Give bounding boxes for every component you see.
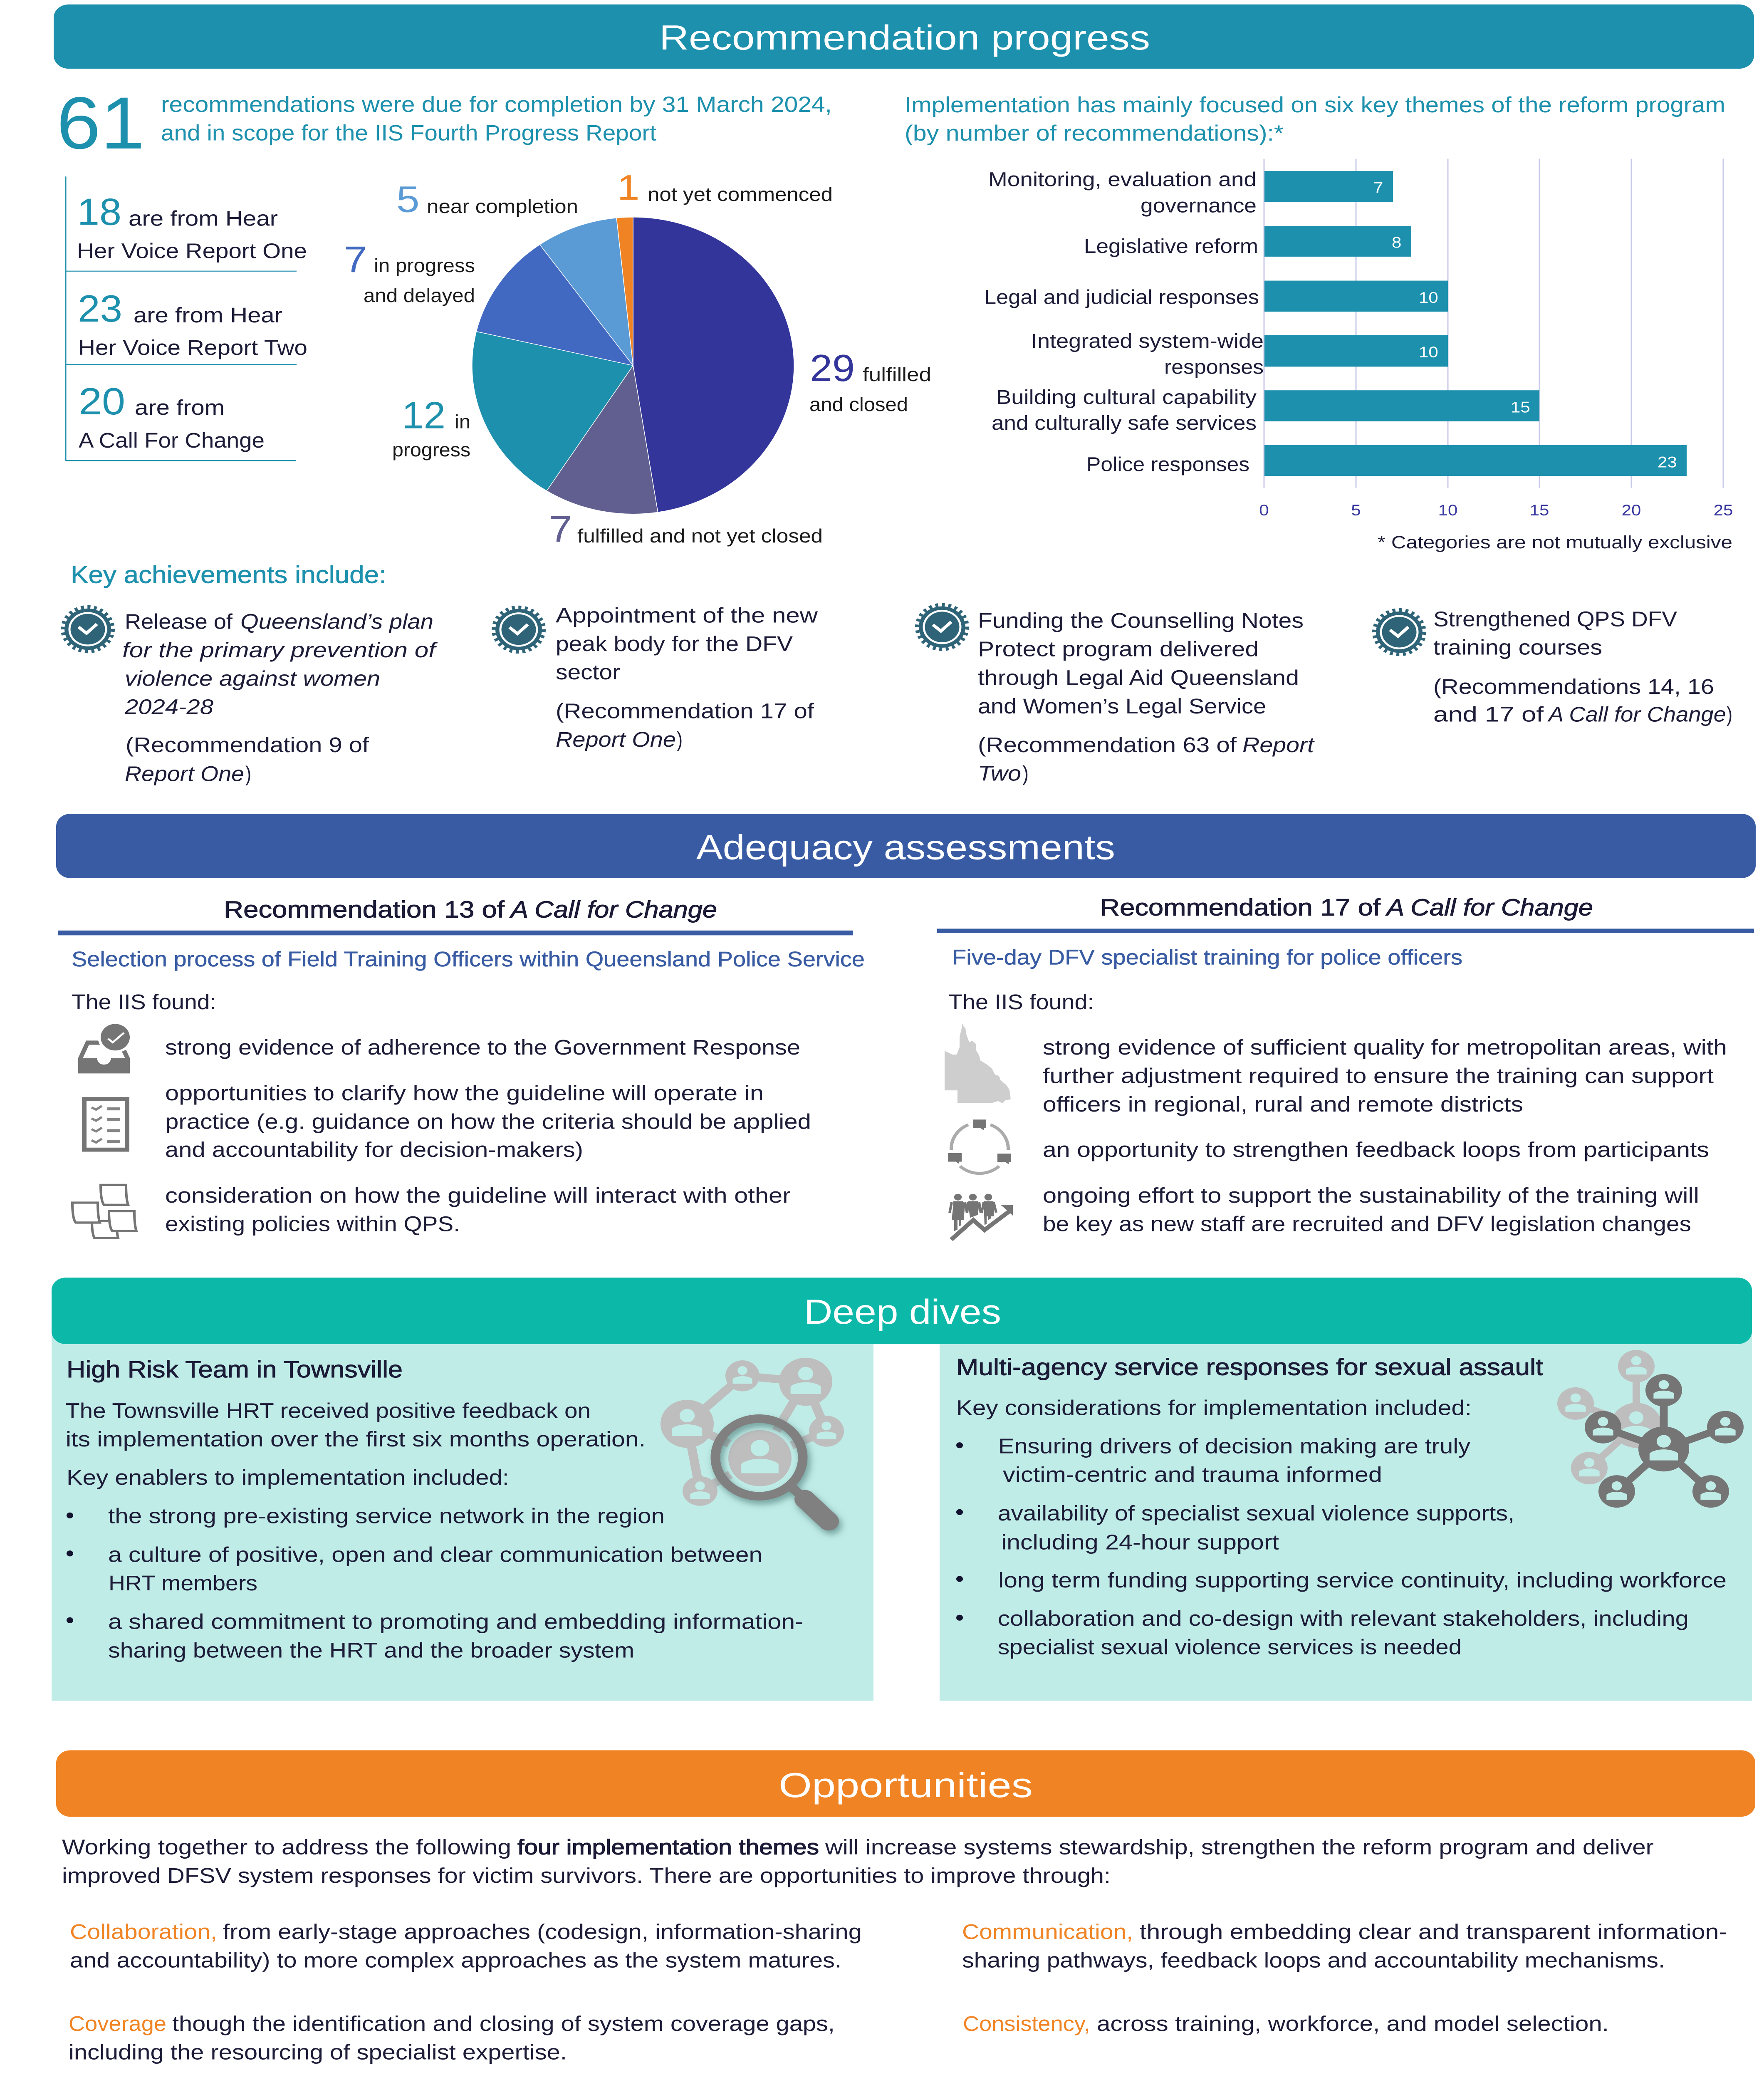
achievement 4: A Call for Change bbox=[1547, 703, 1726, 726]
panel: High Risk Team in Townsville: Key enablers to implementation included: bbox=[67, 1466, 509, 1489]
achievement 2: ) bbox=[677, 728, 683, 751]
subheading: A Call for Change bbox=[510, 896, 717, 923]
intro text right: (by number of recommendations):* bbox=[905, 121, 1284, 146]
panel: multi-agency service responses: Multi-agency service responses for sexual assault bbox=[956, 1354, 1543, 1380]
bar chart: key themes: 10 bbox=[1438, 502, 1457, 519]
panel: multi-agency service responses: Key considerations for implementation included: bbox=[956, 1396, 1472, 1420]
bar chart: key themes: 23 bbox=[1658, 454, 1677, 471]
panel: High Risk Team in Townsville: The Townsville HRT received positive feedback on bbox=[65, 1399, 591, 1423]
heading band: Recommendation progress: Recommendation progress bbox=[659, 18, 1150, 57]
achievement 4: training courses bbox=[1433, 636, 1602, 659]
bar chart: key themes: 5 bbox=[1351, 502, 1361, 519]
panel: High Risk Team in Townsville: a shared commitment to promoting and embedding information- bbox=[108, 1610, 803, 1634]
achievement 4 bbox=[1375, 607, 1732, 726]
panel: High Risk Team in Townsville: High Risk Team in Townsville bbox=[67, 1356, 403, 1382]
panel: report source breakdown bbox=[65, 176, 307, 461]
opportunity: communication bbox=[962, 1920, 1727, 1972]
panel: multi-agency service responses: victim-centric and trauma informed bbox=[1003, 1463, 1382, 1486]
pie label: in progress bbox=[392, 395, 470, 461]
intro text right bbox=[905, 93, 1725, 146]
pie label: near completion: near completion bbox=[427, 196, 578, 217]
pie label: in progress: 12 bbox=[402, 395, 445, 436]
panel: report source breakdown: 23 bbox=[78, 288, 122, 330]
panel: recommendation 17 bbox=[937, 894, 1754, 1240]
bar chart: key themes: 0 bbox=[1259, 502, 1269, 519]
bar chart: key themes: Monitoring, evaluation and bbox=[988, 168, 1257, 191]
intro text left: and in scope for the IIS Fourth Progress Report bbox=[161, 121, 656, 146]
intro paragraph: improved DFSV system responses for victim survivors. There are opportunities to improve through: bbox=[62, 1864, 1111, 1887]
panel: multi-agency service responses: collaboration and co-design with relevant stakeholders, including bbox=[998, 1607, 1689, 1630]
opportunity: coverage: though the identification and closing of system coverage gaps, bbox=[172, 2012, 835, 2035]
achievement 4: Strengthened QPS DFV bbox=[1433, 607, 1677, 631]
achievement 1: for the primary prevention of bbox=[122, 639, 438, 662]
panel: report source breakdown: are from Hear bbox=[134, 304, 282, 327]
achievement 4: (Recommendations 14, 16 bbox=[1433, 675, 1714, 698]
heading: key achievements: Key achievements include: bbox=[71, 562, 386, 589]
panel: recommendation 13: and accountability for decision-makers) bbox=[165, 1138, 583, 1161]
bar chart: key themes: Legal and judicial responses bbox=[984, 286, 1259, 308]
opportunity: coverage bbox=[69, 2012, 835, 2064]
pie label: fulfilled and closed: 29 bbox=[810, 347, 855, 389]
opportunity: collaboration: from early-stage approaches (codesign, information-sharing bbox=[223, 1920, 862, 1944]
intro text left bbox=[161, 92, 832, 146]
achievement 2: peak body for the DFV bbox=[556, 632, 793, 656]
panel: report source breakdown: Her Voice Report One bbox=[77, 239, 307, 263]
panel: recommendation 17: The IIS found: bbox=[948, 990, 1094, 1014]
bar chart: key themes: Legislative reform bbox=[1084, 235, 1258, 257]
opportunity: consistency: across training, workforce, and model selection. bbox=[1097, 2012, 1609, 2035]
panel: multi-agency service responses bbox=[940, 1329, 1752, 1701]
achievement 1: violence against women bbox=[125, 667, 380, 691]
intro text left: recommendations were due for completion by 31 March 2024, bbox=[161, 92, 832, 117]
panel: report source breakdown: Her Voice Report Two bbox=[78, 336, 307, 359]
panel: multi-agency service responses: specialist sexual violence services is needed bbox=[998, 1636, 1462, 1659]
pie label: fulfilled and closed: and closed bbox=[809, 394, 908, 415]
panel: recommendation 17: strong evidence of sufficient quality for metropolitan areas, with bbox=[1043, 1036, 1727, 1059]
panel: recommendation 13: The IIS found: bbox=[72, 990, 216, 1014]
bar chart: key themes: 25 bbox=[1714, 502, 1733, 519]
icon: connected people network bbox=[1557, 1350, 1744, 1508]
pie label: fulfilled and not yet closed: fulfilled and not yet closed bbox=[577, 525, 823, 547]
subheading bbox=[1100, 894, 1593, 921]
heading band: Adequacy assessments: Adequacy assessments bbox=[696, 828, 1115, 867]
bar chart: key themes bbox=[984, 159, 1733, 519]
bar chart: key themes: Integrated system-wide bbox=[1031, 330, 1264, 352]
bar chart: key themes: Police responses bbox=[1086, 453, 1249, 475]
achievement 2 bbox=[494, 604, 818, 751]
panel: report source breakdown: are from bbox=[135, 396, 225, 419]
section: adequacy assessments bbox=[56, 814, 1756, 1240]
panel: recommendation 17: further adjustment required to ensure the training can support bbox=[1043, 1064, 1714, 1088]
pie label: not yet commenced: not yet commenced bbox=[648, 184, 833, 205]
bar chart: key themes: and culturally safe services bbox=[992, 412, 1257, 434]
bar chart: key themes: 10 bbox=[1419, 289, 1438, 306]
subheading: Recommendation 17 of bbox=[1100, 894, 1381, 921]
pie label: in progress: progress bbox=[392, 439, 470, 461]
pie label: in progress and delayed bbox=[344, 239, 475, 306]
panel: recommendation 17: officers in regional, rural and remote districts bbox=[1043, 1093, 1523, 1116]
topic line: Five-day DFV specialist training for police officers bbox=[952, 946, 1462, 969]
opportunity: communication: through embedding clear and transparent information- bbox=[1140, 1920, 1727, 1944]
subheading bbox=[224, 896, 717, 923]
panel: recommendation 13: opportunities to clarify how the guideline will operate in bbox=[165, 1082, 764, 1105]
achievement 3 bbox=[918, 605, 1315, 785]
icon: people with growth arrow bbox=[950, 1194, 1013, 1240]
panel: High Risk Team in Townsville: HRT members bbox=[109, 1572, 257, 1595]
achievement 3: through Legal Aid Queensland bbox=[978, 666, 1299, 690]
bar chart: key themes: governance bbox=[1141, 194, 1257, 217]
panel: report source breakdown: are from Hear bbox=[129, 207, 278, 230]
panel: multi-agency service responses: Ensuring drivers of decision making are truly bbox=[998, 1435, 1470, 1458]
opportunity: consistency: Consistency, bbox=[963, 2012, 1090, 2035]
intro paragraph: will increase systems stewardship, strengthen the reform program and deliver bbox=[825, 1836, 1654, 1859]
big number 61: 61 bbox=[57, 82, 145, 164]
panel: report source breakdown: A Call For Change bbox=[79, 429, 265, 452]
intro paragraph: Working together to address the following bbox=[62, 1836, 511, 1859]
pie label: not yet commenced bbox=[617, 168, 833, 208]
heading band: Deep dives bbox=[52, 1278, 1752, 1344]
panel: recommendation 13: practice (e.g. guidance on how the criteria should be applied bbox=[165, 1110, 811, 1134]
icon: checklist bbox=[84, 1099, 127, 1150]
achievement 1: Report One bbox=[125, 762, 244, 786]
panel: recommendation 17: be key as new staff are recruited and DFV legislation changes bbox=[1043, 1212, 1691, 1236]
bar chart: key themes: 10 bbox=[1419, 344, 1438, 361]
achievement 3: Protect program delivered bbox=[978, 637, 1259, 661]
achievement 3: (Recommendation 63 of bbox=[978, 733, 1237, 757]
bar chart: key themes: Building cultural capability bbox=[996, 386, 1257, 408]
achievement 3: Funding the Counselling Notes bbox=[978, 609, 1304, 632]
intro paragraph: four implementation themes bbox=[517, 1836, 819, 1859]
icon: feedback loop bbox=[948, 1119, 1011, 1174]
topic line: Selection process of Field Training Officers within Queensland Police Service bbox=[72, 948, 865, 971]
achievement 3: Two bbox=[978, 762, 1021, 785]
achievement 1: 2024-28 bbox=[124, 696, 213, 719]
achievement 2: sector bbox=[556, 661, 620, 684]
panel: recommendation 13 bbox=[58, 896, 865, 1238]
heading band: Opportunities bbox=[56, 1750, 1755, 1817]
pie label: near completion bbox=[396, 179, 578, 220]
panel: recommendation 17: an opportunity to strengthen feedback loops from participants bbox=[1043, 1138, 1709, 1161]
achievement 2: (Recommendation 17 of bbox=[556, 699, 814, 723]
section: recommendation progress bbox=[54, 5, 1754, 786]
icon: badge bbox=[63, 607, 112, 651]
bar chart: key themes: 20 bbox=[1622, 502, 1641, 519]
bar chart: key themes: 8 bbox=[1392, 234, 1401, 251]
achievement 1: (Recommendation 9 of bbox=[126, 733, 369, 757]
subheading: Recommendation 13 of bbox=[224, 896, 505, 923]
heading band: Recommendation progress bbox=[54, 5, 1754, 69]
panel: High Risk Team in Townsville: its implementation over the first six months operation. bbox=[66, 1428, 646, 1451]
panel: High Risk Team in Townsville: sharing between the HRT and the broader system bbox=[108, 1639, 634, 1662]
panel: recommendation 17: ongoing effort to support the sustainability of the training will bbox=[1043, 1184, 1699, 1207]
panel: report source breakdown: 20 bbox=[79, 381, 125, 423]
achievement 4: ) bbox=[1727, 703, 1732, 726]
pie label: in progress and delayed: 7 bbox=[344, 239, 367, 280]
achievement 3: Report bbox=[1242, 733, 1315, 757]
bar chart: key themes: 15 bbox=[1511, 399, 1530, 416]
icon: inbox with tick bbox=[78, 1024, 130, 1073]
icon: badge bbox=[1375, 610, 1424, 654]
bar chart: key themes: responses bbox=[1164, 356, 1264, 378]
opportunity: collaboration bbox=[70, 1920, 862, 1972]
achievement 1: ) bbox=[245, 762, 251, 786]
panel: High Risk Team in Townsville: the strong pre-existing service network in the region bbox=[108, 1504, 665, 1528]
pie chart: recommendation status bbox=[472, 217, 794, 514]
achievement 3: and Women’s Legal Service bbox=[978, 695, 1266, 718]
achievement 1: Release of bbox=[125, 610, 233, 634]
achievement 2: Report One bbox=[556, 728, 676, 751]
bar chart: key themes: 7 bbox=[1373, 179, 1383, 196]
heading band: Adequacy assessments bbox=[56, 814, 1756, 878]
panel: multi-agency service responses: long term funding supporting service continuity, including workforce bbox=[998, 1569, 1727, 1592]
panel: recommendation 13: existing policies within QPS. bbox=[165, 1212, 460, 1236]
pie label: not yet commenced: 1 bbox=[617, 168, 639, 208]
icon: network under magnifying glass bbox=[661, 1358, 844, 1521]
panel: recommendation 13: consideration on how the guideline will interact with other bbox=[165, 1184, 791, 1207]
heading band: Opportunities: Opportunities bbox=[779, 1766, 1033, 1805]
achievement 2: Appointment of the new bbox=[556, 604, 818, 627]
achievement 1: Queensland’s plan bbox=[240, 610, 433, 634]
panel: multi-agency service responses: including 24-hour support bbox=[1001, 1530, 1279, 1554]
panel: recommendation 13: strong evidence of adherence to the Government Response bbox=[165, 1036, 800, 1059]
intro text right: Implementation has mainly focused on six key themes of the reform program bbox=[905, 93, 1725, 117]
pie label: in progress and delayed: and delayed bbox=[364, 285, 475, 306]
pie label: fulfilled and not yet closed bbox=[549, 508, 823, 550]
opportunity: communication: Communication, bbox=[962, 1920, 1133, 1944]
icon: Queensland map bbox=[945, 1023, 1011, 1103]
bar chart: key themes: 15 bbox=[1530, 502, 1549, 519]
opportunity: collaboration: and accountability) to more complex approaches as the system matures. bbox=[70, 1949, 841, 1972]
footnote: * Categories are not mutually exclusive bbox=[1378, 532, 1732, 552]
section: deep dives bbox=[52, 1278, 1752, 1701]
pie label: fulfilled and closed bbox=[809, 347, 931, 415]
opportunity: coverage: including the resourcing of specialist expertise. bbox=[69, 2040, 567, 2064]
panel: report source breakdown: 18 bbox=[77, 191, 121, 233]
opportunity: collaboration: Collaboration, bbox=[70, 1920, 217, 1944]
subheading: A Call for Change bbox=[1385, 894, 1593, 921]
pie label: fulfilled and closed: fulfilled bbox=[863, 364, 931, 385]
pie label: in progress: in bbox=[455, 411, 470, 433]
icon: badge bbox=[494, 608, 543, 651]
achievement 4: and 17 of bbox=[1433, 703, 1544, 726]
achievement 1 bbox=[63, 607, 438, 786]
panel: High Risk Team in Townsville: a culture of positive, open and clear communication between bbox=[108, 1543, 762, 1567]
icon: badge bbox=[918, 605, 967, 649]
panel: multi-agency service responses: availability of specialist sexual violence supports, bbox=[998, 1502, 1514, 1525]
pie label: near completion: 5 bbox=[396, 179, 420, 220]
section: opportunities bbox=[56, 1750, 1755, 2064]
heading band: Deep dives: Deep dives bbox=[804, 1293, 1001, 1331]
opportunity: coverage: Coverage bbox=[69, 2012, 166, 2035]
pie label: fulfilled and not yet closed: 7 bbox=[549, 508, 572, 550]
opportunity: communication: sharing pathways, feedback loops and accountability mechanisms. bbox=[962, 1949, 1665, 1972]
panel: High Risk Team in Townsville bbox=[52, 1329, 873, 1701]
pie label: in progress and delayed: in progress bbox=[374, 255, 475, 277]
icon: linked documents bbox=[72, 1185, 136, 1238]
achievement 3: ) bbox=[1022, 762, 1029, 785]
intro paragraph bbox=[62, 1836, 1654, 1887]
